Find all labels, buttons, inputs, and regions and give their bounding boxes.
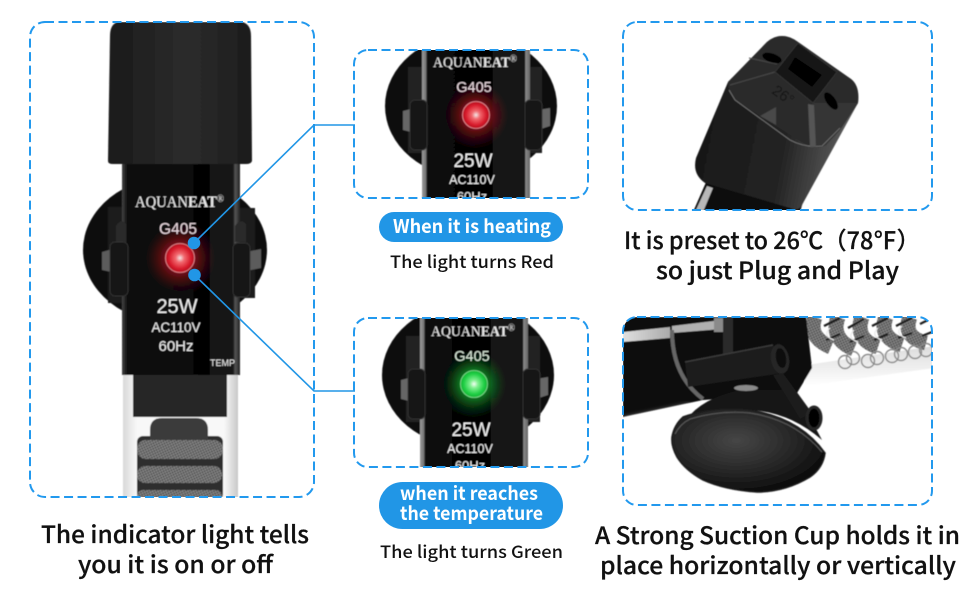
collar [133, 375, 227, 417]
disc [381, 318, 555, 436]
pill: temperature reached: the temperature [400, 499, 543, 526]
clip bars [410, 100, 427, 150]
body [420, 309, 528, 474]
clip bar end [769, 343, 791, 375]
outline [623, 22, 932, 210]
outline [354, 50, 588, 198]
pill: temperature reached [379, 479, 563, 529]
embossed marker [760, 107, 776, 125]
caption: preset temperature [624, 221, 920, 286]
connector: LED to green panel [188, 269, 355, 391]
connector: LED to red panel [188, 125, 355, 249]
square hole [788, 57, 822, 87]
panel: indicator light heater [30, 22, 314, 502]
model: G405 [456, 80, 492, 96]
glass tube [800, 346, 934, 386]
brand: AQUANEAT [431, 324, 510, 340]
LED [166, 244, 194, 272]
top face edge [729, 90, 840, 146]
panel: red light heating [353, 49, 589, 199]
heater photo [83, 22, 267, 502]
strut [773, 373, 812, 419]
disc [384, 50, 558, 166]
brackets [406, 336, 540, 422]
straps [403, 108, 550, 133]
body [422, 40, 530, 205]
frequency: 60Hz [158, 338, 194, 355]
vent holes [761, 51, 783, 65]
glow [441, 351, 507, 417]
clip bar top edge [685, 345, 773, 362]
straps [401, 377, 548, 402]
pill: heating: When it is heating [393, 212, 552, 239]
pill: temperature reached: when it reaches [400, 479, 538, 506]
temp label: TEMP [210, 358, 235, 368]
caption: red: The light turns Red [390, 248, 554, 273]
brackets [408, 67, 542, 153]
clip glints [116, 221, 246, 242]
clip bars [110, 242, 128, 296]
voltage: AC110V [449, 173, 495, 187]
caption: indicator light: you it is on or off [78, 545, 275, 580]
tilted cap photo [693, 36, 858, 212]
cap body [695, 36, 858, 209]
heating coil [137, 418, 223, 502]
wattage: 25W [451, 420, 491, 441]
wattage: 25W [156, 296, 198, 318]
outline [354, 318, 588, 467]
right facet [813, 103, 858, 147]
model: G405 [454, 349, 490, 365]
caption: indicator light: The indicator light tells [41, 515, 309, 550]
tube highlight left [623, 327, 670, 342]
facet highlight [808, 104, 816, 147]
square port [775, 43, 837, 103]
top face [728, 36, 858, 147]
left bracket [108, 207, 122, 303]
brand text: AQUANEAT [135, 194, 220, 211]
right bracket [240, 208, 255, 298]
brand: ® [510, 54, 517, 65]
glow [443, 82, 509, 148]
glass tube [123, 375, 238, 500]
facet lines [730, 58, 777, 85]
coil mesh [813, 317, 932, 368]
cap [108, 22, 252, 164]
caption: preset temperature: It is preset to 26℃（78℉） [624, 221, 920, 256]
strut foot [807, 407, 821, 429]
embossed temperature: 26° [769, 82, 797, 109]
collar rim [672, 330, 703, 399]
wattage: 25W [453, 151, 493, 172]
suction cup photo [623, 317, 934, 492]
brand: AQUANEAT [433, 55, 512, 71]
tube highlight [695, 186, 713, 212]
LED [462, 102, 490, 128]
strap [102, 248, 261, 273]
cup [672, 409, 825, 492]
mini heater green [381, 318, 555, 467]
panel: green light reached temperature [353, 317, 589, 468]
tube base fade [623, 403, 690, 423]
heater tube [623, 317, 812, 417]
panel: preset thermostat cap [623, 22, 932, 212]
model: G405 [159, 221, 197, 238]
caption: suction cup: place horizontally or vertically [600, 546, 956, 581]
caption: green: The light turns Green [380, 538, 563, 563]
glow [146, 222, 212, 292]
suction cup disc [82, 189, 268, 311]
caption: preset temperature: so just Plug and Play [656, 251, 899, 286]
caption: suction cup: A Strong Suction Cup holds it in [595, 516, 960, 551]
tube below cap [693, 180, 805, 212]
outline [623, 317, 932, 505]
brand text: ® [217, 194, 224, 205]
tube highlight collar [672, 320, 722, 333]
brand: ® [508, 323, 515, 334]
voltage: AC110V [447, 442, 493, 456]
cup rim highlight [675, 412, 822, 452]
body [122, 163, 240, 375]
mini heater red [384, 50, 558, 198]
clip bars [408, 369, 425, 419]
panel outline [30, 22, 314, 497]
clip bar [685, 345, 783, 387]
clip vertical [723, 317, 733, 362]
frequency: 60Hz [455, 458, 485, 473]
cup dome [686, 390, 822, 440]
caption: suction cup [595, 516, 960, 581]
clip vertical highlight [714, 318, 723, 332]
LED [460, 370, 488, 398]
frequency: 60Hz [457, 189, 487, 204]
neck highlight [734, 385, 758, 391]
caption: indicator light [41, 515, 309, 580]
voltage: AC110V [152, 320, 201, 335]
panel: suction cup [623, 317, 934, 505]
